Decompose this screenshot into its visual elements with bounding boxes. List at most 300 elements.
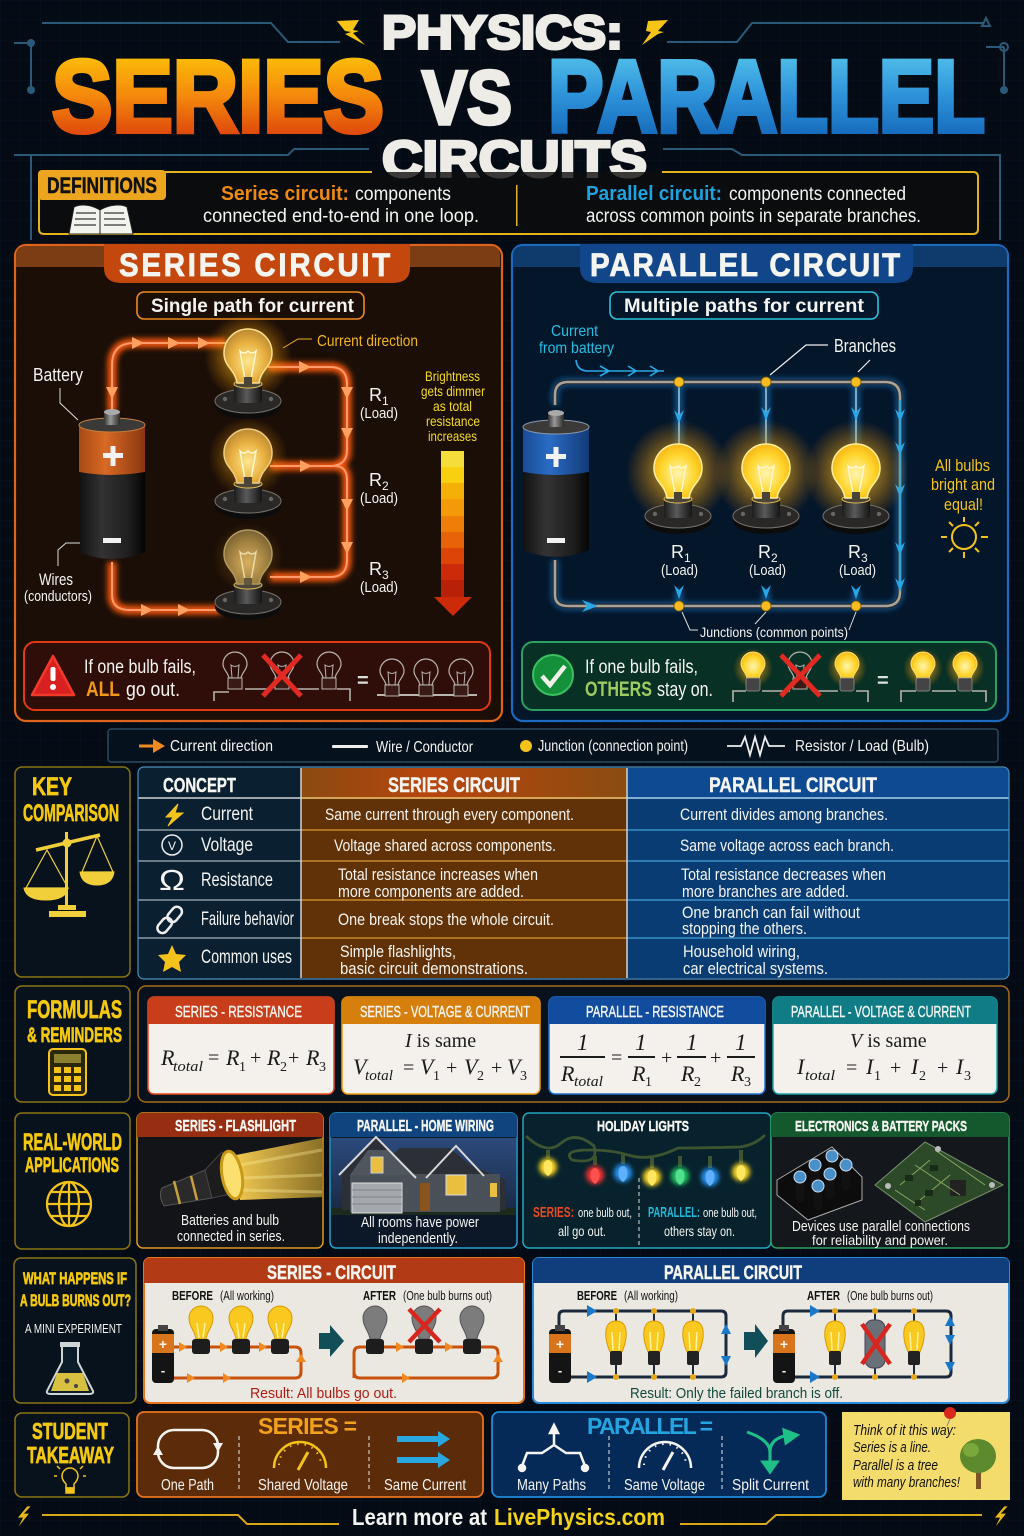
label: current from battery: [539, 323, 614, 357]
series column: [301, 768, 627, 978]
note: all bulbs bright: [931, 456, 995, 514]
card: flashlight: SERIES - FLASHLIGHT: [175, 1118, 296, 1135]
parallel definition: across common points in separate branches.: [586, 206, 921, 227]
column: concept: [155, 775, 294, 972]
card: home wiring: PARALLEL - HOME WIRING: [357, 1118, 494, 1135]
formula card: parallel voltage and current: I: [796, 1054, 806, 1079]
parallel heading: PARALLEL CIRCUIT: [590, 247, 902, 283]
parallel subtitle pill: Multiple paths for current: [624, 296, 865, 317]
title word: vs: VS: [422, 56, 512, 141]
before label: [577, 1288, 678, 1303]
formula card: parallel resistance: R: [730, 1061, 745, 1086]
icon: flask: [47, 1342, 93, 1394]
card: electronics: Devices use parallel connections: [792, 1218, 970, 1235]
label: battery: [33, 365, 83, 420]
formula card: series voltage and current: I is same: [404, 1030, 476, 1052]
formula card: series voltage and current: V: [353, 1054, 369, 1079]
note: all bulbs bright: equal!: [944, 495, 983, 514]
formula card: series voltage and current: [342, 997, 540, 1094]
labels: parallel R values: (Load): [749, 562, 786, 579]
panel: what happens label: A BULB BURNS OUT?: [20, 1291, 131, 1310]
panel: formulas label: & REMINDERS: [27, 1024, 122, 1047]
labels: parallel R values: 2: [771, 551, 778, 565]
formula card: parallel voltage and current: V is same: [850, 1030, 927, 1052]
card: electronics: for reliability and power.: [812, 1232, 948, 1248]
icon: globe: [47, 1182, 91, 1226]
formula card: series voltage and current: V: [464, 1054, 480, 1079]
icon: gauge: [639, 1442, 691, 1470]
formula card: parallel resistance: 1: [735, 1030, 746, 1055]
card: flashlight: Batteries and bulb: [181, 1212, 279, 1229]
panel: real-world label: REAL-WORLD: [23, 1129, 122, 1156]
title: [52, 6, 985, 188]
sticky note: with many branches!: [853, 1474, 961, 1491]
formula card: parallel resistance: +: [661, 1047, 672, 1069]
label: wires: Wires: [39, 570, 73, 589]
card: home wiring: independently.: [378, 1230, 458, 1247]
series current arrows: [106, 337, 353, 616]
formula card: parallel voltage and current: total: [805, 1068, 835, 1084]
before label: (All working): [624, 1288, 678, 1303]
panel: key comparison label: COMPARISON: [23, 800, 119, 827]
label: current direction: [283, 333, 418, 350]
after circuit: [773, 1305, 955, 1383]
parallel cells: Current divides among branches.: [680, 805, 888, 824]
after label: [363, 1288, 492, 1303]
label: junctions: [682, 612, 856, 640]
formula card: series voltage and current: SERIES - VOLTAGE & CURRENT: [360, 1004, 530, 1021]
formula card: series voltage and current: +: [446, 1057, 457, 1079]
icon: idea bulb: [54, 1466, 86, 1493]
label: junctions: Junctions (common points): [700, 624, 848, 640]
panel: parallel takeaway: [492, 1412, 826, 1497]
before label: [172, 1288, 274, 1303]
labels: R values: R: [369, 559, 382, 579]
takeaway: split current: Split Current: [732, 1477, 809, 1494]
panel: student takeaway label: [15, 1413, 129, 1497]
parallel failure callout: [522, 642, 996, 710]
icon: gauge: [274, 1442, 326, 1470]
formula card: parallel resistance: total: [574, 1074, 603, 1090]
formula card: parallel resistance: 3: [744, 1075, 751, 1090]
formula card: series resistance: 1: [239, 1060, 246, 1075]
sticky note: Series is a line.: [853, 1439, 931, 1456]
row: failure: Failure behavior: [201, 909, 294, 930]
labels: R values: 3: [382, 568, 389, 582]
series cells: Voltage shared across components.: [334, 836, 556, 855]
series definition: Series circuit:: [221, 183, 349, 205]
takeaway: shared voltage: Shared Voltage: [258, 1477, 348, 1494]
equals: =: [877, 670, 889, 692]
icon: scales: [24, 832, 114, 917]
after label: [807, 1288, 933, 1303]
panel: series takeaway: [137, 1412, 483, 1497]
string lights: [526, 1135, 765, 1186]
title word: series: SERIES: [52, 40, 384, 154]
legend bar: [108, 729, 998, 762]
after label: AFTER: [363, 1288, 396, 1303]
card: holiday lights: others stay on.: [664, 1223, 735, 1239]
divider: [516, 185, 518, 226]
takeaway: same current: Same Current: [384, 1477, 466, 1494]
formula card: series voltage and current: 2: [477, 1069, 484, 1084]
formula card: series voltage and current: V: [507, 1054, 523, 1079]
series cells: Total resistance increases when: [338, 865, 538, 884]
legend: wire: Wire / Conductor: [376, 739, 474, 756]
legend: junction: Junction (connection point): [538, 738, 688, 755]
sticky note: Think of it this way:: [853, 1422, 956, 1439]
failed bulbs diagram: [214, 652, 350, 701]
formula card: parallel resistance: +: [710, 1047, 721, 1069]
parallel cells: One branch can fail without: [682, 903, 860, 922]
legend: resistor: [727, 737, 929, 755]
panel: series experiment: [144, 1258, 524, 1403]
panel: parallel takeaway: PARALLEL =: [587, 1413, 713, 1439]
series subtitle pill: Single path for current: [151, 296, 355, 317]
series cells: One break stops the whole circuit.: [338, 910, 554, 929]
takeaway: same voltage: Same Voltage: [624, 1477, 705, 1494]
result: Result: Only the failed branch is off.: [630, 1385, 843, 1402]
parallel cells: Same voltage across each branch.: [680, 836, 894, 855]
brightness arrow: [434, 451, 472, 616]
legend: resistor: Resistor / Load (Bulb): [795, 738, 929, 755]
failure text: [84, 657, 196, 701]
formula card: parallel resistance: =: [611, 1047, 622, 1069]
panel: formulas label: FORMULAS: [27, 996, 122, 1024]
formula card: series resistance: 2: [280, 1060, 287, 1075]
panel: what happens label: A MINI EXPERIMENT: [25, 1321, 122, 1336]
parallel definition: Parallel circuit:: [586, 183, 722, 205]
big arrow: [744, 1324, 768, 1358]
icon: calculator: [49, 1049, 86, 1095]
formula card: parallel voltage and current: I: [910, 1054, 920, 1079]
parallel cells: [680, 805, 894, 978]
series cells: Same current through every component.: [325, 805, 574, 824]
after label: (One bulb burns out): [847, 1288, 933, 1303]
formula card: parallel resistance: 1: [577, 1030, 588, 1055]
labels: parallel R values: (Load): [839, 562, 876, 579]
series definition: components: [355, 184, 451, 205]
failure text: If one bulb fails,: [84, 657, 196, 678]
label: battery: Battery: [33, 365, 83, 385]
icon: arrows: [397, 1431, 450, 1468]
series definition: [203, 183, 479, 227]
before circuit: [549, 1305, 731, 1383]
panel: parallel experiment: [533, 1258, 1009, 1403]
icon: chain: [155, 905, 184, 935]
battery: parallel: [523, 410, 589, 557]
brightness note: increases: [428, 428, 477, 444]
title word: circuits: CIRCUITS: [382, 130, 647, 188]
takeaway: many paths: Many Paths: [517, 1477, 586, 1494]
failure text: If one bulb fails,: [585, 657, 698, 678]
failure text: OTHERS: [585, 678, 652, 701]
big arrow: [319, 1325, 344, 1357]
card: holiday lights: HOLIDAY LIGHTS: [597, 1118, 689, 1135]
brightness note: as total: [433, 398, 472, 414]
parallel cells: car electrical systems.: [683, 959, 828, 978]
icon: footer right bolt: [995, 1506, 1008, 1526]
labels: R values: 1: [382, 394, 389, 408]
formula card: series resistance: R: [266, 1045, 281, 1070]
labels: R values: R: [369, 470, 382, 490]
formula card: parallel resistance: R: [631, 1061, 646, 1086]
sticky note: Parallel is a tree: [853, 1457, 938, 1474]
failure text: ALL: [86, 678, 120, 701]
icon: lightning: [166, 804, 183, 826]
series failure callout: [24, 642, 490, 710]
parallel definition: components connected: [729, 184, 906, 205]
formula card: series resistance: SERIES - RESISTANCE: [175, 1004, 302, 1021]
junction dots: [674, 377, 861, 611]
footer: LivePhysics.com: [494, 1504, 665, 1530]
series heading: SERIES CIRCUIT: [119, 247, 393, 283]
labels: R values: 2: [382, 479, 389, 493]
formula card: series resistance: +: [288, 1047, 299, 1069]
parallel cells: Household wiring,: [683, 942, 800, 961]
bulb R2: [208, 417, 288, 519]
before circuit: [152, 1306, 306, 1383]
icon: book: [69, 205, 133, 234]
card: holiday lights: one bulb out,: [703, 1205, 757, 1220]
formula card: series resistance: +: [250, 1047, 261, 1069]
labels: R values: (Load): [360, 579, 398, 596]
brightness note: [421, 368, 485, 444]
icon: footer left bolt: [18, 1506, 31, 1526]
definitions badge: DEFINITIONS: [47, 173, 157, 198]
brightness note: resistance: [426, 413, 480, 429]
failure text: [585, 657, 713, 701]
labels: parallel R values: R: [671, 542, 684, 562]
formula card: series resistance: =: [208, 1047, 219, 1069]
panel: student takeaway label: TAKEAWAY: [27, 1442, 114, 1468]
all off bulbs: [377, 659, 477, 696]
parallel subtitle pill: [610, 292, 878, 319]
card: home wiring: [330, 1113, 517, 1248]
card: home wiring: All rooms have power: [361, 1214, 479, 1231]
label: branches: Branches: [834, 336, 896, 356]
battery: series: [79, 409, 145, 559]
series column: SERIES CIRCUIT: [388, 774, 520, 797]
footer: Learn more at: [352, 1504, 487, 1530]
panel: what happens label: [14, 1258, 136, 1403]
title frame circuit lines: [14, 18, 1008, 240]
icon: split: [747, 1430, 797, 1472]
formula card: series voltage and current: V: [420, 1054, 436, 1079]
formula card: parallel resistance: [549, 997, 765, 1094]
bulb parallel R3: [804, 420, 908, 534]
formula card: series resistance: [148, 997, 334, 1094]
formula card: parallel resistance: 1: [645, 1075, 652, 1090]
icon: sun: [941, 517, 988, 558]
labels: parallel R values: [661, 542, 876, 579]
before label: (All working): [220, 1288, 274, 1303]
card: flashlight: connected in series.: [177, 1228, 285, 1245]
panel: formulas label: [15, 986, 130, 1102]
panel: key comparison label: KEY: [32, 773, 72, 801]
series cells: basic circuit demonstrations.: [340, 959, 528, 978]
legend: current direction: [139, 738, 273, 755]
card: holiday lights: one bulb out,: [578, 1205, 632, 1220]
card: electronics: [771, 1113, 1009, 1248]
parallel cells: stopping the others.: [682, 919, 807, 938]
series definition: connected end-to-end in one loop.: [203, 206, 479, 227]
equals: =: [357, 670, 369, 692]
icon: voltage: V: [168, 839, 176, 853]
result: Result: All bulbs go out.: [250, 1385, 397, 1402]
after circuit: [354, 1306, 503, 1383]
icon: loop: [153, 1430, 223, 1468]
formula card: series resistance: 3: [319, 1060, 326, 1075]
parallel arrows: [576, 360, 905, 612]
formula card: series voltage and current: total: [365, 1068, 393, 1084]
brightness note: Brightness: [425, 368, 480, 384]
two lit bulbs: [901, 648, 986, 702]
formula card: series voltage and current: +: [491, 1057, 502, 1079]
footer: [18, 1504, 1008, 1530]
before label: BEFORE: [577, 1288, 617, 1303]
formula card: parallel voltage and current: 3: [964, 1069, 971, 1084]
panel: student takeaway label: STUDENT: [32, 1418, 108, 1444]
formula card: parallel voltage and current: =: [846, 1057, 857, 1079]
bulb parallel R1: [626, 420, 730, 534]
title line: physics: PHYSICS:: [382, 6, 623, 58]
after label: AFTER: [807, 1288, 840, 1303]
panel: series takeaway: SERIES =: [258, 1413, 357, 1439]
icon: right bolt: [642, 20, 668, 45]
label: branches: [770, 336, 896, 375]
formula card: parallel resistance: 2: [694, 1075, 701, 1090]
series wires: [112, 343, 347, 610]
icon: voltage: [162, 835, 182, 855]
bulb R1: [204, 313, 292, 419]
formula card: parallel resistance: PARALLEL - RESISTANCE: [586, 1004, 724, 1021]
panel: formulas: [138, 986, 1009, 1102]
labels: R values: R: [369, 385, 382, 405]
panel: key comparison label: [15, 767, 130, 977]
bulb parallel R2: [714, 420, 818, 534]
icon: check: [533, 655, 573, 695]
parallel definition: [586, 183, 921, 227]
definitions badge: [38, 170, 166, 200]
failure text: go out.: [126, 679, 180, 701]
formula card: parallel resistance: R: [560, 1061, 575, 1086]
formula card: parallel voltage and current: 2: [919, 1069, 926, 1084]
panel: real-world label: APPLICATIONS: [25, 1154, 119, 1177]
formula card: series resistance: total: [173, 1059, 203, 1075]
card: flashlight: [137, 1113, 323, 1248]
labels: parallel R values: 3: [861, 551, 868, 565]
formula card: series voltage and current: 1: [433, 1069, 440, 1084]
flashlight illustration: [160, 1138, 322, 1206]
brightness note: gets dimmer: [421, 383, 485, 399]
after label: (One bulb burns out): [403, 1288, 492, 1303]
card: holiday lights: [523, 1113, 771, 1248]
icon: warning: [32, 656, 74, 695]
formula card: series resistance: R: [160, 1045, 175, 1070]
parallel wires: [555, 382, 900, 606]
note: all bulbs bright: All bulbs: [935, 456, 990, 475]
house illustration: [331, 1137, 516, 1215]
bulb R3: [212, 522, 284, 620]
legend: wire: [332, 739, 474, 756]
icon: pin: [944, 1407, 956, 1426]
parallel cells: Total resistance decreases when: [681, 865, 886, 884]
label: current direction: Current direction: [317, 333, 418, 350]
parallel column: [627, 768, 1009, 978]
card: holiday lights: all go out.: [558, 1223, 606, 1239]
icon: branching paths: [519, 1425, 588, 1471]
formula card: parallel voltage and current: 1: [874, 1069, 881, 1084]
formula card: parallel resistance: 1: [635, 1030, 646, 1055]
label: current from battery: Current: [551, 323, 598, 340]
formula card: series voltage and current: =: [403, 1057, 414, 1079]
icon: left bolt: [337, 20, 365, 45]
formula card: parallel voltage and current: I: [865, 1054, 875, 1079]
panel: parallel experiment: PARALLEL CIRCUIT: [664, 1263, 802, 1284]
takeaway: one path: One Path: [161, 1477, 214, 1494]
failed branch diagram: [733, 648, 868, 702]
row: resistance: Resistance: [201, 870, 273, 891]
formula card: parallel voltage and current: +: [890, 1057, 901, 1079]
battery pack illustration: [777, 1147, 862, 1220]
formula card: parallel voltage and current: [773, 997, 997, 1094]
sticky note: [842, 1407, 1010, 1500]
labels: parallel R values: R: [758, 542, 771, 562]
labels: R values: (Load): [360, 405, 398, 422]
card: holiday lights: PARALLEL:: [648, 1204, 700, 1221]
series subtitle pill: [137, 292, 364, 319]
row: common uses: Common uses: [201, 947, 292, 968]
formula card: parallel resistance: R: [680, 1061, 695, 1086]
failure text: stay on.: [657, 679, 713, 701]
panel: real-world label: [15, 1113, 130, 1249]
comparison table: [138, 767, 1009, 979]
panel: series experiment: SERIES - CIRCUIT: [267, 1263, 396, 1284]
table rules: [138, 768, 1009, 978]
labels: parallel R values: 1: [684, 551, 691, 565]
column: concept: CONCEPT: [163, 775, 236, 797]
series cells: Simple flashlights,: [340, 942, 456, 961]
formula card: series voltage and current: 3: [520, 1069, 527, 1084]
label: wires: (conductors): [24, 588, 92, 605]
label: current from battery: from battery: [539, 340, 614, 357]
circuit board illustration: [875, 1142, 1003, 1222]
legend: current direction: Current direction: [170, 738, 273, 755]
panel: parallel circuit: [512, 244, 1008, 721]
parallel column: PARALLEL CIRCUIT: [709, 774, 877, 797]
labels: parallel R values: (Load): [661, 562, 698, 579]
formula card: parallel voltage and current: I: [955, 1054, 965, 1079]
panel: definitions: [38, 170, 978, 234]
panel: what happens label: WHAT HAPPENS IF: [23, 1269, 127, 1288]
icon: ohm: Ω: [159, 865, 185, 897]
labels: parallel R values: R: [848, 542, 861, 562]
formula card: series resistance: R: [225, 1045, 240, 1070]
series cells: [325, 805, 574, 978]
panel: series circuit: [15, 244, 502, 721]
formula card: series resistance: R: [305, 1045, 320, 1070]
label: wires: [24, 543, 92, 605]
row: voltage: Voltage: [201, 835, 253, 856]
series cells: more components are added.: [338, 882, 524, 901]
parallel cells: more branches are added.: [682, 882, 849, 901]
note: all bulbs bright: bright and: [931, 475, 995, 494]
card: holiday lights: SERIES:: [533, 1204, 574, 1221]
formula card: parallel voltage and current: +: [937, 1057, 948, 1079]
formula card: parallel resistance: 1: [686, 1030, 698, 1055]
icon: star: [158, 945, 186, 972]
